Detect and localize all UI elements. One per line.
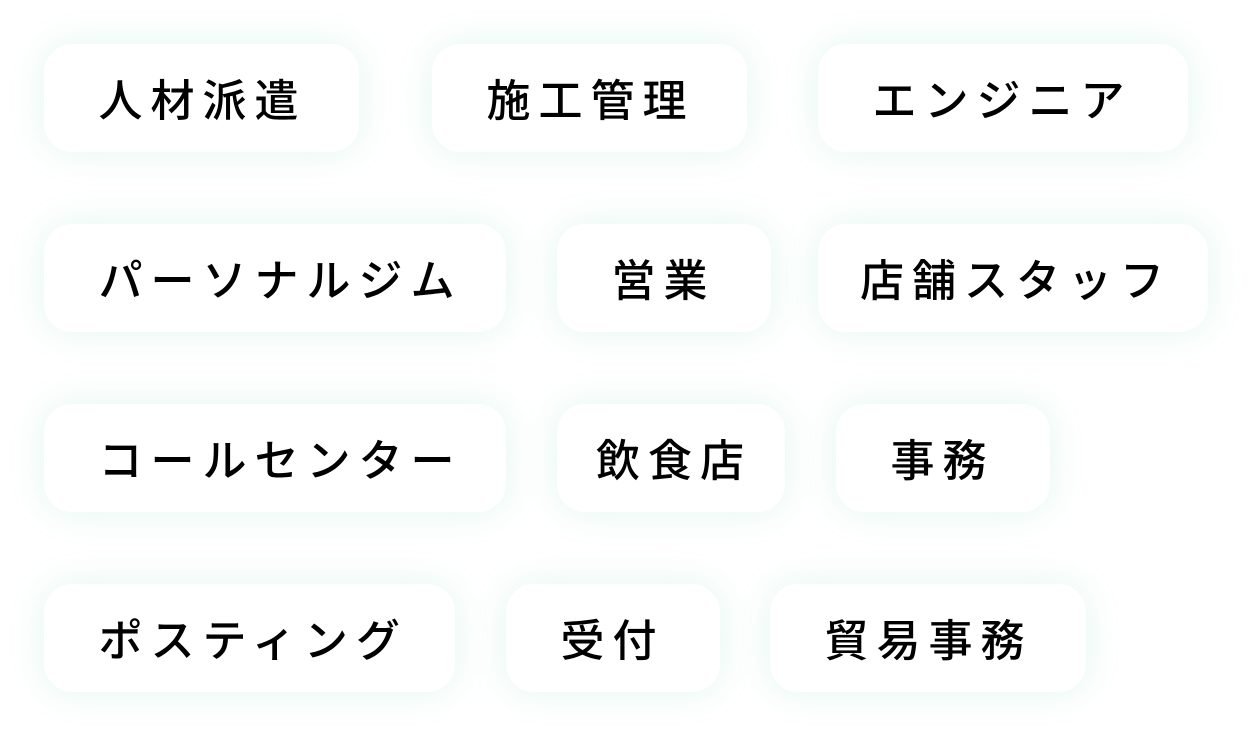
tag: 営業: 営業 [612,245,716,309]
tag: ポスティング [44,584,455,692]
tag: パーソナルジム: パーソナルジム [98,245,462,309]
tag: ポスティング: ポスティング [98,605,408,669]
tag: 店舗スタッフ [818,224,1208,332]
tag: 人材派遣 [44,44,359,152]
tag: 事務: 事務 [890,425,994,489]
tag: エンジニア [818,44,1188,152]
tag: 店舗スタッフ: 店舗スタッフ [860,245,1172,309]
tag: 飲食店 [557,404,785,512]
tag: エンジニア: エンジニア [872,65,1132,129]
tag: 営業 [557,224,771,332]
tag: 受付 [506,584,720,692]
tag: 貿易事務 [770,584,1086,692]
tag: コールセンター: コールセンター [98,425,462,489]
tag: 受付: 受付 [560,605,664,669]
tag: 人材派遣: 人材派遣 [98,65,306,129]
tag: 飲食店: 飲食店 [596,425,752,489]
tag: コールセンター [44,404,506,512]
tag: 事務 [836,404,1050,512]
tag: パーソナルジム [44,224,506,332]
tag: 施工管理: 施工管理 [486,65,694,129]
tag: 貿易事務: 貿易事務 [824,605,1032,669]
tag: 施工管理 [432,44,747,152]
